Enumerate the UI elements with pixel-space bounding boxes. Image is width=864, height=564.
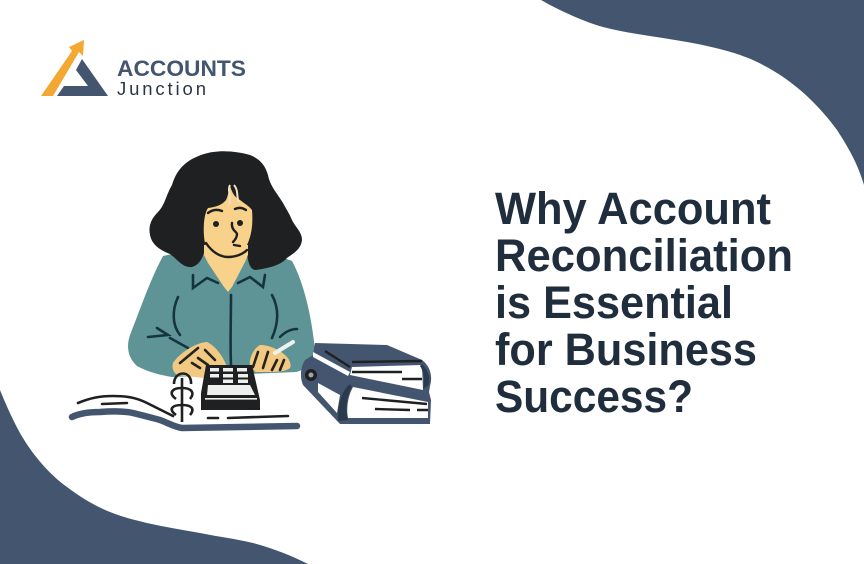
logo [41,40,246,99]
neck [204,245,248,292]
upper binder pages [350,365,423,390]
hands [172,342,227,378]
illustration: woman at desk [72,151,431,428]
title: Why Account [495,183,771,234]
finger lines [180,348,284,370]
collar and shirt lines [148,275,297,365]
title [495,183,793,422]
shirt [128,250,315,377]
title: Reconciliation [495,230,793,281]
title: Success? [495,371,693,422]
notebook spiral binding [172,374,192,422]
lower binder spine [338,384,352,421]
notebook [72,396,297,428]
logo wordmark: Junction [117,78,206,99]
binder ring hole [305,369,317,381]
binder silhouette [301,343,431,424]
upper binder edge strip [313,352,350,376]
face [204,186,252,257]
logo icon: triangle with arrow [41,40,108,96]
upper binder spine [420,364,429,389]
logo wordmark [117,56,246,99]
calculator [201,365,260,410]
pencil [275,342,293,353]
bottom left corner blob [0,390,308,564]
hair strand [229,185,239,205]
lower binder window [318,383,340,413]
face details [206,208,247,257]
binders [301,343,431,424]
top right corner blob [541,0,864,185]
title: for Business [495,324,757,375]
title: is Essential [495,277,733,328]
lower binder pages [347,387,428,418]
binder text lines [325,351,428,410]
hair [149,151,302,270]
logo wordmark: ACCOUNTS [117,56,246,81]
